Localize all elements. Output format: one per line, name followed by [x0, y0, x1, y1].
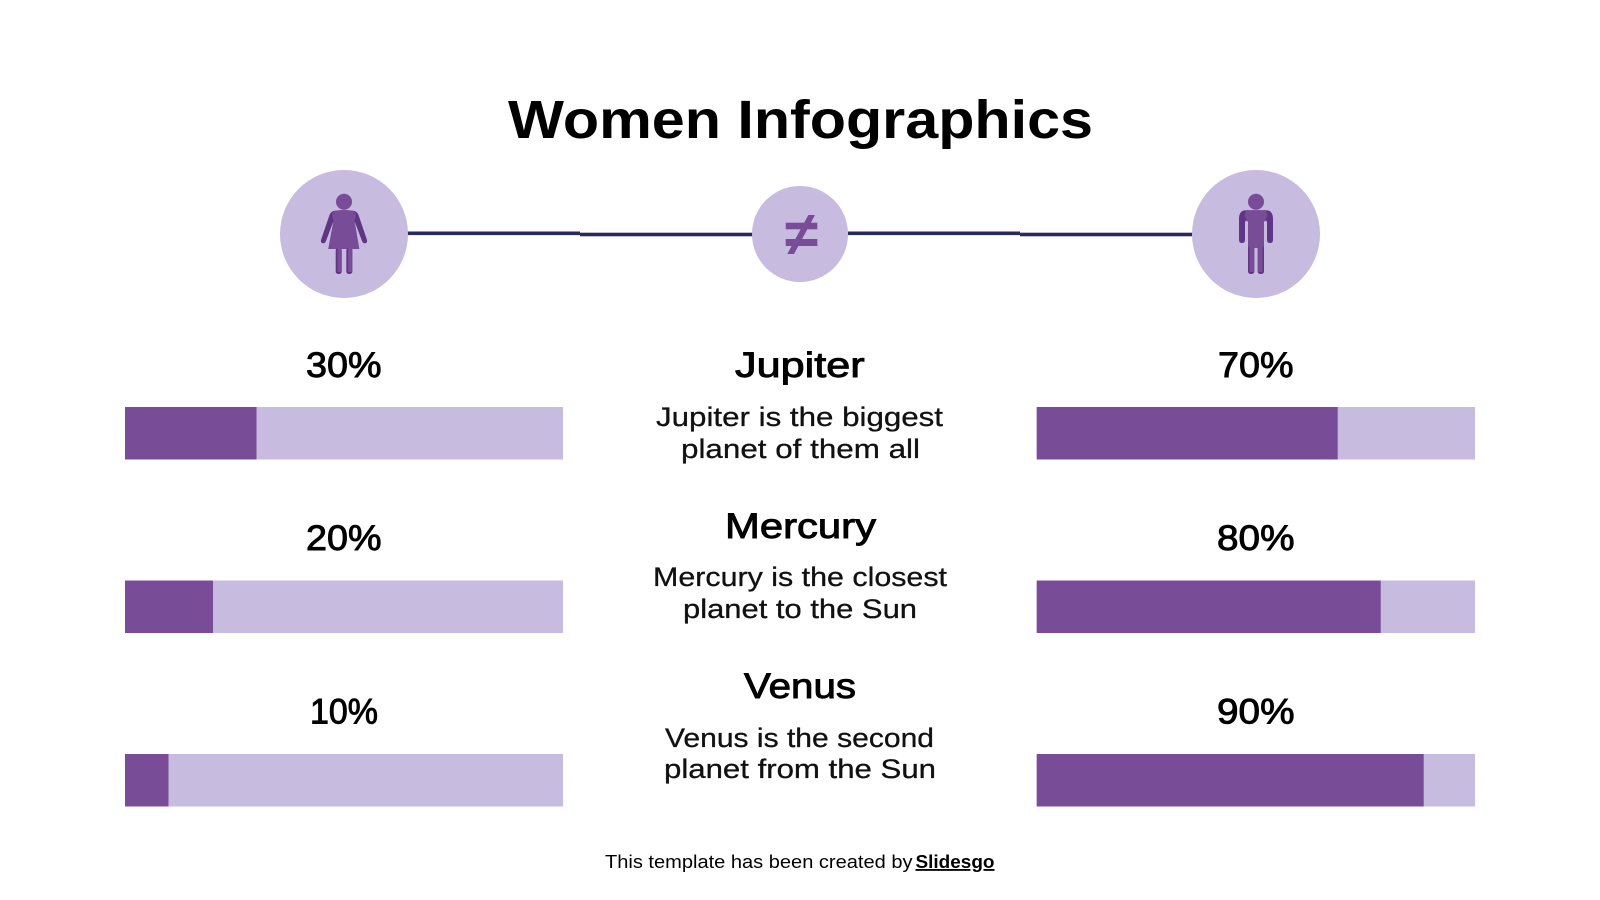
- title: Women Infographics: [508, 90, 1093, 150]
- left bar: 20%: [125, 580, 563, 633]
- right value: 90%: 90%: [1217, 692, 1294, 732]
- text: Mercury description: Mercury is the closest: [653, 562, 948, 592]
- heading: Jupiter: Jupiter: [735, 346, 865, 385]
- footer credit: This template has been created by: [605, 851, 913, 872]
- left value: 30%: 30%: [306, 346, 382, 385]
- connector lines: [407, 232, 1192, 236]
- right value: 70%: 70%: [1218, 346, 1294, 385]
- icon: not equal: [752, 186, 848, 282]
- left bar: 10%: [125, 754, 563, 806]
- heading: Mercury: Mercury: [725, 507, 877, 546]
- left bar: 30%: [125, 407, 563, 460]
- text: Mercury description: planet to the Sun: [683, 594, 917, 624]
- right bar: 80%: [1037, 580, 1475, 633]
- text: Mercury description: [653, 562, 948, 624]
- text: Venus description: [664, 723, 936, 784]
- right bar: 90%: [1037, 754, 1475, 806]
- left value: 10%: 10%: [310, 692, 378, 732]
- icon: man: [1192, 170, 1320, 298]
- right bar: 70%: [1037, 407, 1475, 460]
- text: Jupiter description: Jupiter is the biggest: [656, 402, 944, 432]
- footer credit: Slidesgo: [916, 851, 994, 872]
- text: Venus description: Venus is the second: [665, 723, 934, 753]
- text: Jupiter description: [656, 402, 944, 464]
- left value: 20%: 20%: [306, 519, 382, 558]
- icon: woman: [280, 170, 408, 298]
- text: Venus description: planet from the Sun: [664, 754, 936, 784]
- right value: 80%: 80%: [1217, 519, 1294, 558]
- text: Jupiter description: planet of them all: [681, 434, 920, 464]
- heading: Venus: Venus: [744, 667, 856, 706]
